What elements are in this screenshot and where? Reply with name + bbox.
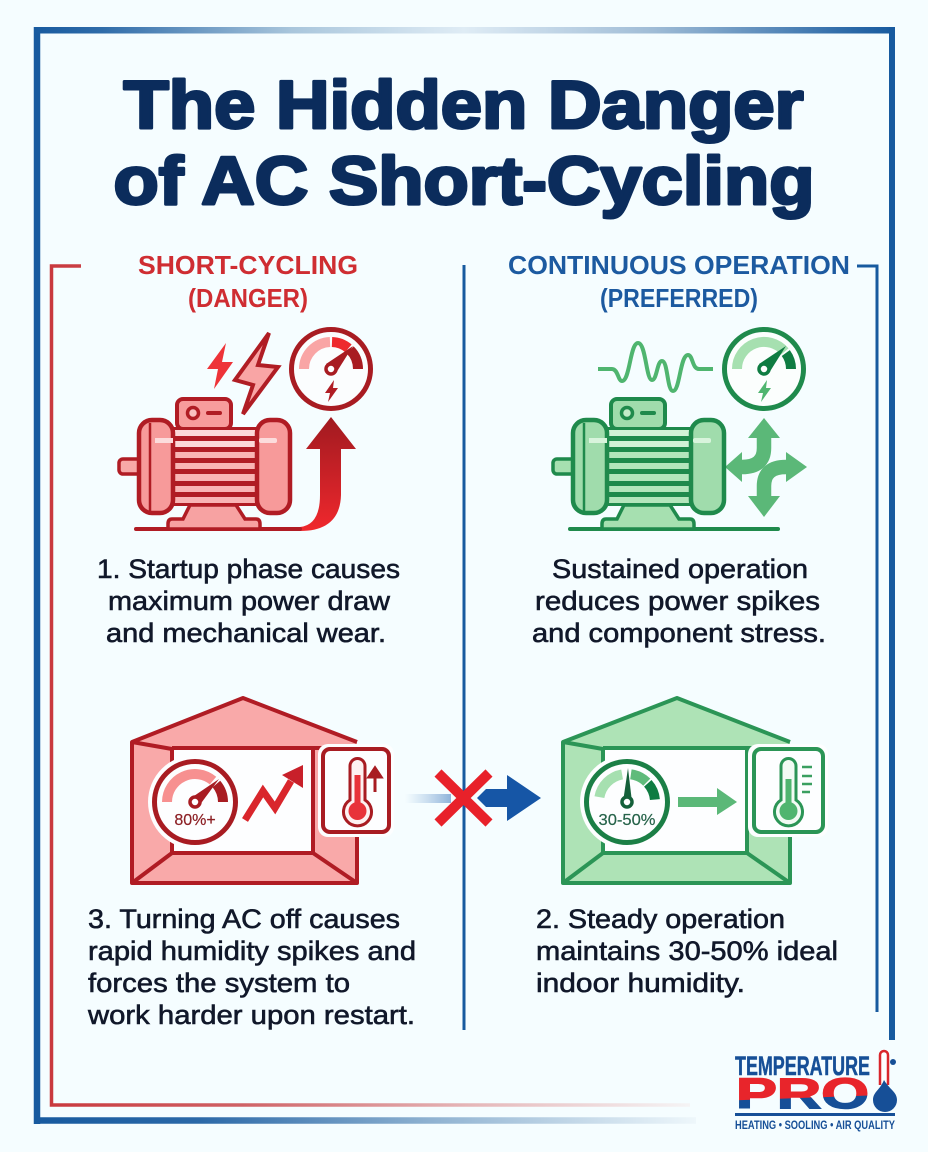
panel: green motor graphic	[553, 330, 807, 529]
icon: rising power arrow	[300, 417, 356, 531]
icon: power gauge	[292, 330, 370, 408]
icon: steady wave	[598, 343, 713, 391]
heading: short-cycling: (DANGER)	[188, 283, 308, 313]
icon: steady arrow	[678, 788, 737, 815]
text block: turning ac off	[87, 904, 416, 1030]
title	[114, 67, 815, 219]
icon: humidity gauge 30-50 percent	[580, 755, 674, 849]
text block: steady operation	[536, 904, 838, 998]
text block: startup phase: 1. Startup phase causes	[97, 554, 400, 584]
logo thermometer and drop	[873, 1051, 897, 1112]
text block: turning ac off: 3. Turning AC off causes	[88, 904, 400, 934]
logo tagline: HEATING • SOOLING • AIR QUALITY	[735, 1120, 895, 1132]
icon: thermometer card rising	[318, 744, 394, 837]
text block: steady operation: indoor humidity.	[536, 968, 745, 998]
panel: red motor graphic	[119, 330, 370, 531]
heading: continuous operation: CONTINUOUS OPERATION	[508, 250, 850, 280]
inner frame: preferred side	[857, 266, 877, 1012]
text block: sustained operation: Sustained operation	[552, 554, 808, 584]
icon: humidity gauge 30-50 percent: 30-50%	[598, 812, 656, 829]
text block: startup phase: maximum power draw	[108, 586, 391, 616]
panel: green house humidity graphic	[563, 698, 828, 883]
blue arrow	[477, 775, 541, 821]
text block: sustained operation: reduces power spikes	[535, 586, 820, 616]
panel: red house humidity graphic	[132, 698, 394, 883]
logo rule	[735, 1113, 895, 1116]
title: The Hidden Danger	[124, 67, 804, 143]
heading: short-cycling: SHORT-CYCLING	[138, 250, 358, 280]
text block: sustained operation: and component stress.	[532, 618, 826, 648]
fading arrow tail	[405, 794, 451, 803]
text block: steady operation: maintains 30-50% ideal	[536, 936, 838, 966]
text block: steady operation: 2. Steady operation	[536, 904, 785, 934]
icon: electric motor	[553, 399, 778, 529]
text block: sustained operation	[532, 554, 826, 648]
icon: house	[563, 698, 790, 883]
logo: temperature pro	[728, 1044, 903, 1136]
text block: turning ac off: rapid humidity spikes and	[88, 936, 416, 966]
logo background	[728, 1044, 903, 1136]
icon: large lightning bolt	[235, 333, 278, 414]
text block: turning ac off: work harder upon restart.	[87, 1000, 415, 1030]
icon: low power gauge	[724, 330, 804, 408]
icon: four-way arrows	[725, 418, 807, 517]
red x	[438, 773, 489, 823]
icon: humidity gauge 80 percent: 80%+	[174, 812, 216, 829]
heading: continuous operation: (PREFERRED)	[600, 283, 758, 313]
heading: short-cycling	[138, 250, 358, 313]
text block: turning ac off: forces the system to	[88, 968, 350, 998]
title: of AC Short-Cycling	[114, 143, 815, 219]
icon: house	[132, 698, 357, 883]
icon: humidity gauge 80 percent	[148, 755, 242, 849]
icon: thermometer card steady	[748, 744, 828, 837]
icon: blocked transition arrow	[405, 773, 541, 823]
icon: small lightning bolt	[207, 343, 233, 389]
inner frame: danger side	[52, 266, 690, 1105]
text block: startup phase: and mechanical wear.	[106, 618, 386, 648]
text block: startup phase	[97, 554, 400, 648]
icon: electric motor	[119, 399, 300, 529]
center divider	[462, 265, 466, 1030]
heading: continuous operation	[508, 250, 850, 313]
icon: rising trend arrow	[245, 765, 303, 820]
logo wordmark pro: PRO	[736, 1070, 869, 1118]
